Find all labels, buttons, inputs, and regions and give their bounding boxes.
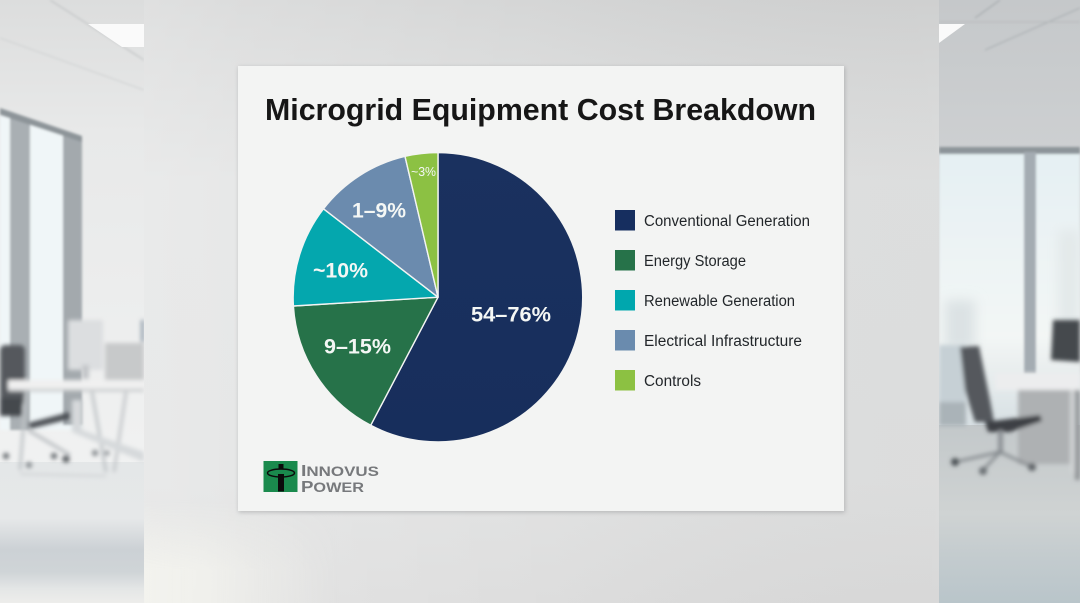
- pie value labels: [313, 165, 551, 358]
- label: ~10%: ~10%: [313, 258, 368, 282]
- logo wordmark: [301, 463, 379, 496]
- legend item: Renewable Generation: Renewable Generation: [644, 293, 795, 310]
- logo icon: [264, 461, 298, 492]
- slice: Conventional Generation: [371, 152, 583, 442]
- background: central wall strip: [144, 0, 939, 603]
- legend item: Conventional Generation: Conventional Generation: [644, 213, 810, 230]
- legend item: Controls: [615, 370, 701, 390]
- label: 9–15%: 9–15%: [324, 334, 391, 358]
- legend item: Renewable Generation: [615, 290, 795, 310]
- ceiling light left: [88, 24, 144, 47]
- legend: [615, 210, 810, 390]
- logo: Innovus Power: [264, 461, 379, 496]
- pie chart: [293, 152, 583, 442]
- label: 1–9%: 1–9%: [352, 198, 406, 222]
- legend item: Energy Storage: [615, 250, 746, 270]
- slice: Energy Storage: [293, 297, 438, 425]
- logo wordmark: INNOVUS: [301, 463, 379, 480]
- panel: poster: [238, 66, 844, 511]
- slice: Renewable Generation: [293, 209, 438, 306]
- panel: poster shadow: [238, 67, 845, 512]
- legend item: Energy Storage: Energy Storage: [644, 253, 746, 270]
- legend item: Electrical Infrastructure: Electrical Infrastructure: [644, 333, 802, 350]
- title: Microgrid Equipment Cost Breakdown: [265, 92, 816, 127]
- background: left office scene: [0, 0, 144, 603]
- label: ~3%: ~3%: [411, 165, 436, 179]
- slice: Electrical Infrastructure: [324, 156, 438, 297]
- legend item: Controls: Controls: [644, 373, 701, 390]
- ceiling light right: [939, 24, 965, 43]
- legend item: Conventional Generation: [615, 210, 810, 230]
- logo wordmark: POWER: [301, 479, 364, 496]
- background: right office scene: [939, 0, 1080, 603]
- slice: Controls: [405, 152, 438, 297]
- label: 54–76%: 54–76%: [471, 302, 551, 326]
- legend item: Electrical Infrastructure: [615, 330, 802, 350]
